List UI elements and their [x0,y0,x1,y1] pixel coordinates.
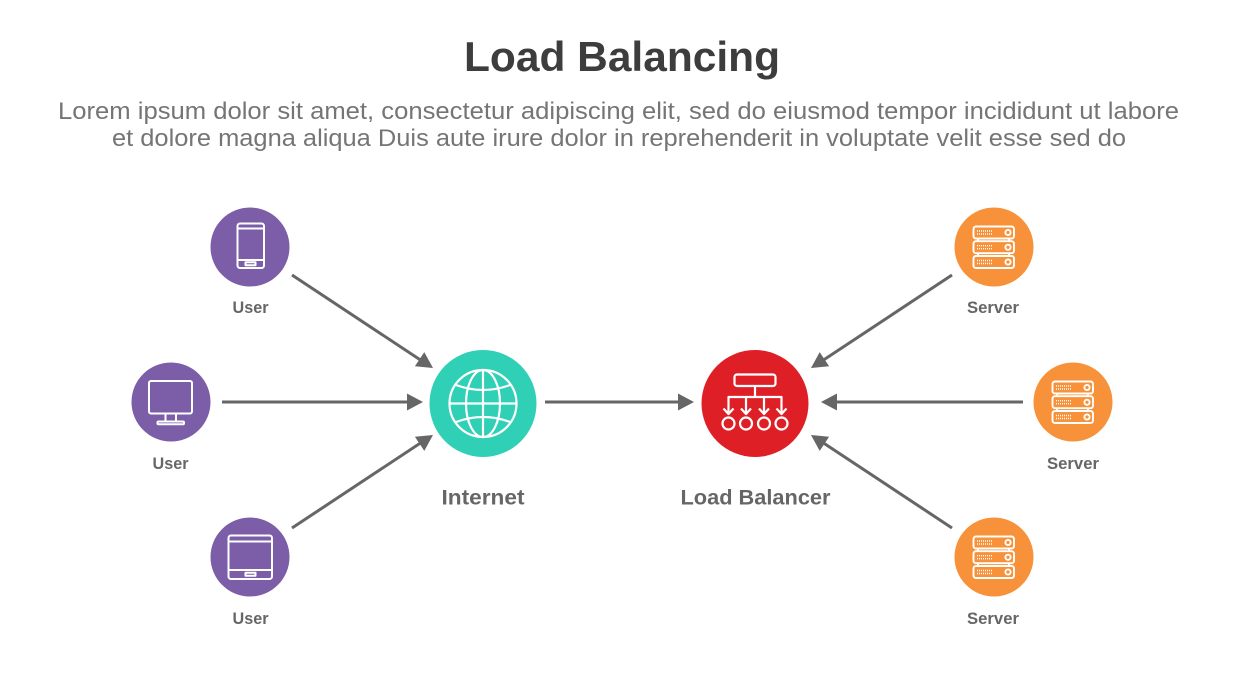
arrow: bottom user to internet [292,435,433,528]
arrow: top user to internet [292,275,433,368]
subtitle text block [58,98,1179,152]
user node: tablet [210,518,290,628]
arrow: bottom server to load balancer [811,435,952,528]
user node: desktop [132,362,210,473]
subtitle text block: Lorem ipsum dolor sit amet, consectetur adipiscing elit, sed do eiusmod tempor incididunt ut labore [58,98,1179,125]
arrow: middle server to load balancer [821,394,1023,410]
user node: phone [210,208,290,317]
title: Load Balancing [464,33,780,80]
server node: bottom [954,518,1034,628]
arrow: middle user to internet [222,394,423,410]
arrow: internet to load balancer [545,394,694,410]
icon: globe [450,370,516,437]
label: user: User [232,610,269,628]
arrow: top server to load balancer [811,275,952,368]
server node: top [954,208,1034,317]
icon: server rack [974,536,1014,578]
label: server: Server [967,610,1020,628]
label: server: Server [1047,455,1100,473]
icon: load balancer hierarchy [722,374,788,430]
icon: server rack [1052,382,1093,423]
internet node [430,350,536,510]
label: server: Server [967,299,1020,317]
icon: tablet [228,536,272,579]
icon: monitor [149,381,192,424]
subtitle text block: et dolore magna aliqua Duis aute irure dolor in reprehenderit in voluptate velit esse sed do [112,125,1126,152]
label: internet: Internet [442,486,524,510]
server node: middle [1034,362,1112,473]
load balancer node [680,350,830,510]
label: load balancer: Load Balancer [680,486,830,510]
icon: server rack [974,226,1014,268]
label: user: User [232,299,269,317]
icon: phone [238,224,264,268]
label: user: User [152,455,189,473]
